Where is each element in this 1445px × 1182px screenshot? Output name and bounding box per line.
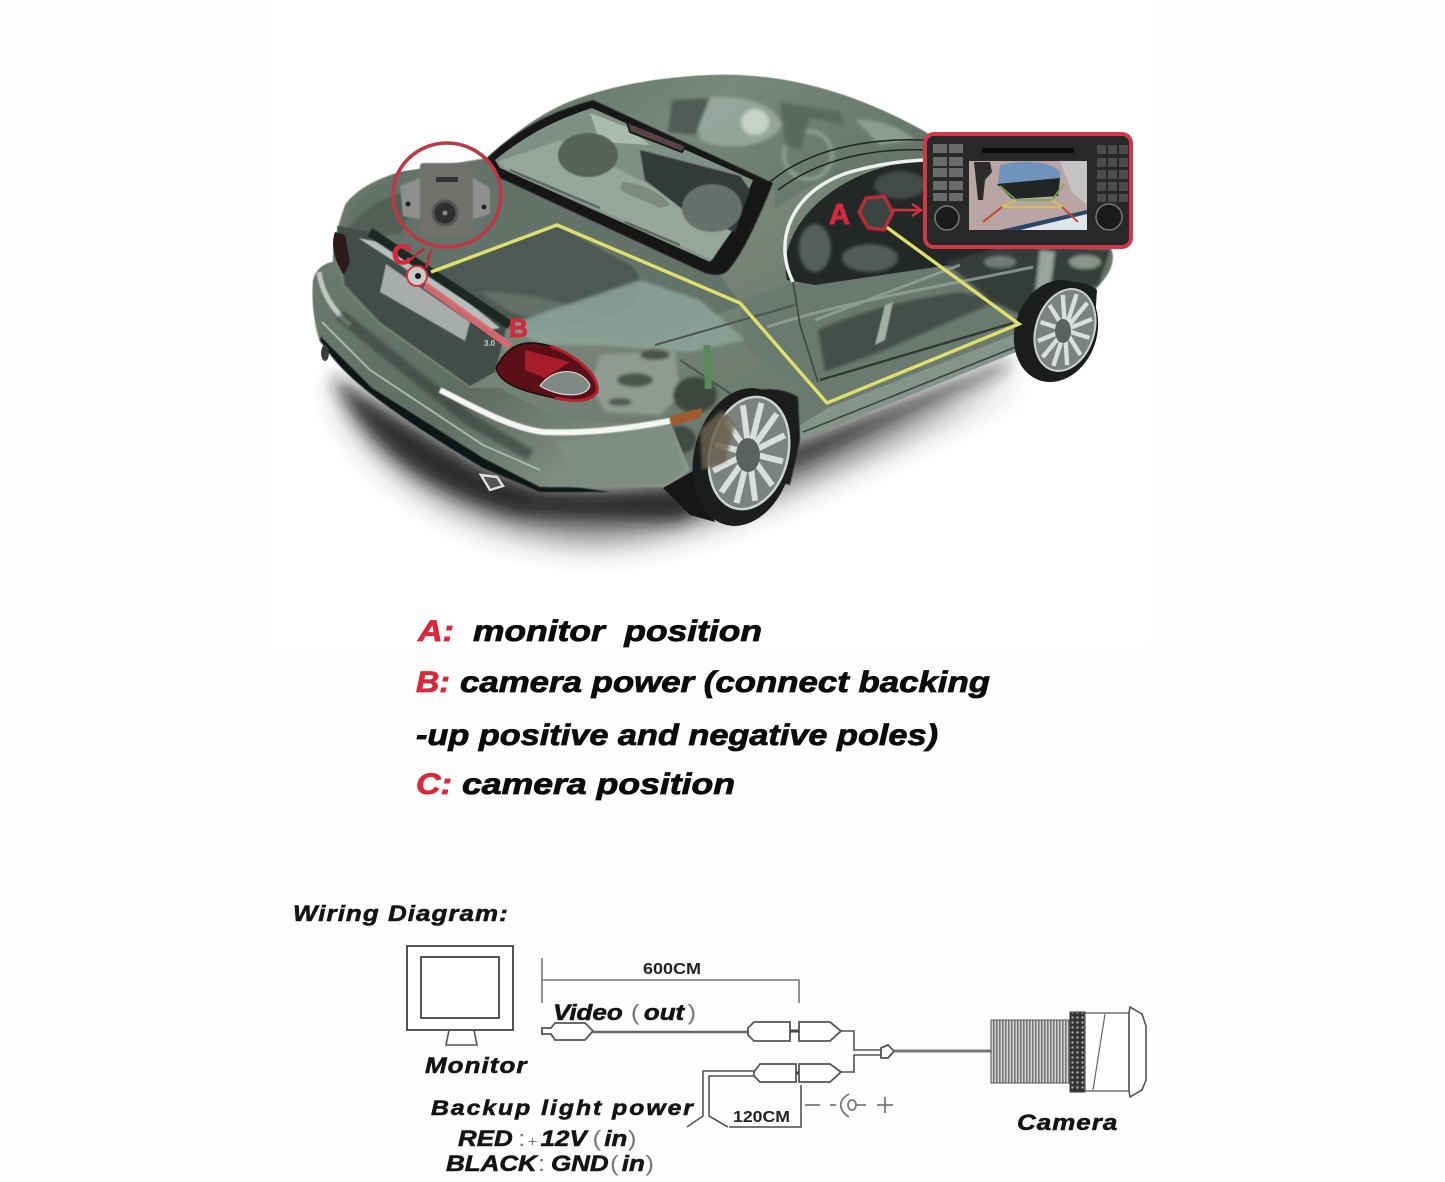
- front rim: [1024, 281, 1106, 379]
- arrow to monitor: [893, 204, 921, 216]
- camera zoom callout: [393, 143, 501, 268]
- camera view ground: [969, 161, 1087, 230]
- tail light lens: [540, 372, 590, 395]
- dark cabin interior: [640, 150, 750, 232]
- lens nose: [1129, 1007, 1146, 1097]
- car body silhouette: [313, 75, 1113, 488]
- camera body: [420, 163, 473, 237]
- hub: [736, 438, 760, 472]
- left exhaust tip: [321, 345, 329, 361]
- door bottom line: [820, 323, 1013, 380]
- 600CM bracket: [542, 958, 799, 1003]
- trunk lid: [340, 160, 742, 345]
- bumper lower pale panel: [545, 428, 685, 486]
- left headrest: [558, 133, 618, 177]
- rim base: [697, 388, 801, 518]
- shelf groove: [510, 170, 680, 245]
- model badge: 3.0: [484, 339, 496, 348]
- door panel dark reflection: [818, 292, 1000, 372]
- seat ghost: [799, 224, 831, 272]
- rear exhaust tip: [481, 475, 503, 490]
- pale ghost panel: [693, 97, 782, 146]
- page background panel: [272, 0, 1150, 645]
- legend B continued: -up positive and negative poles): [416, 719, 938, 752]
- legend text: [416, 615, 990, 801]
- 600CM dimension: [542, 958, 799, 1003]
- bumper ridge line: [322, 322, 540, 470]
- monitor red bezel: [925, 134, 1131, 247]
- tail light: [496, 343, 597, 400]
- side body lower panel: [740, 262, 1095, 440]
- right headrest: [682, 184, 742, 232]
- right dial: [1096, 204, 1122, 230]
- bracket screw right: [482, 204, 486, 210]
- video label: (: [631, 1001, 640, 1025]
- left button block: [933, 144, 963, 201]
- door shut line: [793, 282, 818, 382]
- dash ghost: [842, 244, 898, 272]
- red wire label: ): [628, 1127, 637, 1151]
- threaded body: [991, 1020, 1072, 1083]
- right keypad: [1097, 145, 1128, 202]
- left dial: [935, 206, 959, 230]
- yellow cable route: [431, 225, 1019, 403]
- pale view through glass: [590, 113, 650, 145]
- brake mechanism: [700, 410, 735, 470]
- legend A: A:: [417, 615, 454, 648]
- connector video 2: [799, 1022, 841, 1041]
- legend A: monitor position: [473, 615, 762, 648]
- video label: out: [644, 1001, 685, 1025]
- bumper top highlight: [319, 272, 350, 325]
- marker: camera position ring: [407, 266, 427, 286]
- monitor inner screen: [421, 957, 499, 1018]
- junction body: [881, 1045, 894, 1058]
- monitor screen: [969, 161, 1087, 230]
- window frame: [487, 100, 773, 275]
- power connector 1: [754, 1064, 796, 1082]
- rear bumper: [313, 262, 690, 487]
- red wire label: +: [528, 1134, 537, 1150]
- tail light edge: [550, 346, 597, 400]
- chrome bumper strip: [440, 390, 670, 432]
- monitor outer frame: [407, 946, 513, 1030]
- rear fascia dark panel: [337, 226, 507, 386]
- bracket screw left: [406, 202, 410, 206]
- trunk interior recess: [433, 226, 641, 326]
- rear quarter panel highlight: [507, 280, 745, 352]
- knurled ring: [1070, 1012, 1085, 1092]
- camera brackets: [400, 176, 490, 220]
- centre armrest: [620, 182, 670, 208]
- trunk upper reflection: [345, 190, 420, 235]
- bay shadow: [945, 245, 1110, 320]
- tyre: [679, 377, 807, 537]
- black wire label: in: [622, 1152, 645, 1176]
- under-bumper shadow: [663, 470, 715, 522]
- wire to junction: [841, 1031, 881, 1050]
- legend C: C:: [416, 768, 452, 801]
- license plate: [380, 264, 470, 341]
- camera label: Camera: [1017, 1111, 1117, 1135]
- red wire label: (: [593, 1127, 601, 1151]
- side window chrome frame: [785, 160, 925, 282]
- power connector 2: [799, 1064, 841, 1082]
- 120CM bracket: [729, 1085, 801, 1127]
- underside dark band: [320, 325, 610, 492]
- front arch: [1035, 282, 1097, 330]
- bay pale parts: [1035, 250, 1055, 295]
- car illustration: [313, 75, 1131, 540]
- window glass: [495, 108, 753, 262]
- power wire pair: [687, 1071, 754, 1127]
- rear wheel: [663, 377, 807, 537]
- video wire: [593, 1031, 748, 1033]
- trunk recess light streak: [480, 292, 600, 322]
- marker bar to tail light: [425, 285, 510, 346]
- video cable: [542, 1022, 881, 1050]
- camera view wall: [1060, 161, 1087, 205]
- front hub: [1055, 319, 1071, 343]
- power cable: [687, 1055, 881, 1127]
- front spokes: [1029, 286, 1101, 374]
- green strut: [703, 345, 712, 389]
- camera lens: [433, 201, 457, 225]
- monitor position hexagon: [859, 196, 893, 230]
- ghost window: [741, 109, 769, 135]
- tail light housing: [496, 343, 597, 400]
- rear window: [487, 100, 773, 275]
- rear wheel-well mechanics: [590, 350, 717, 454]
- video plug: [542, 1023, 593, 1040]
- soft outer shadow: [335, 375, 1020, 540]
- roof rail lines: [770, 140, 925, 190]
- barrel accent: [1093, 1014, 1105, 1090]
- dense contact shadow: [330, 358, 1015, 520]
- black wire label: (: [610, 1152, 619, 1176]
- white pavement strip: [1020, 213, 1087, 230]
- legend C: camera position: [462, 768, 735, 801]
- red wire label: in: [604, 1127, 627, 1151]
- side window interior: [786, 160, 1000, 285]
- monitor icon: [407, 946, 513, 1045]
- wheel ghost: [874, 171, 926, 199]
- dash ghost: [780, 102, 845, 150]
- backup power label: Backup light power: [431, 1096, 694, 1120]
- junction and camera lead: [881, 1045, 991, 1058]
- video label: ): [688, 1001, 696, 1025]
- camera slot: [436, 177, 458, 182]
- parcel shelf: [497, 140, 735, 260]
- DC polarity symbol: [805, 1094, 893, 1117]
- video label: Video: [553, 1001, 623, 1025]
- steering wheel ghost: [784, 131, 832, 179]
- headrest ghost: [855, 120, 915, 145]
- mechanical pale cluster: [590, 350, 680, 415]
- lens glint: [442, 210, 448, 216]
- sill face: [800, 330, 1035, 440]
- connector gap: [796, 1072, 799, 1074]
- bumper recess: [340, 315, 530, 455]
- chrome boot strip: [358, 238, 500, 330]
- person silhouette: [974, 162, 992, 200]
- front tyre: [1001, 269, 1111, 393]
- dark mechanical parts: [617, 373, 653, 387]
- monitor stand: [446, 1030, 477, 1045]
- legend B: B:: [416, 666, 450, 699]
- roof: [487, 75, 927, 210]
- front wheel: [1001, 269, 1111, 393]
- wire to junction: [841, 1055, 881, 1072]
- dark boot lip: [370, 232, 510, 325]
- tail lamp left: [333, 232, 350, 275]
- head unit monitor: [925, 134, 1131, 247]
- tail light red reflector: [525, 350, 570, 378]
- wheel arch shadow: [705, 389, 800, 485]
- car ground shadow: [330, 358, 1020, 540]
- spokes: [703, 395, 795, 511]
- red wire label: 12V: [541, 1127, 589, 1151]
- camera barrel: [1085, 1013, 1129, 1091]
- parking guide lines: [983, 184, 1078, 222]
- monitor label: Monitor: [425, 1054, 528, 1078]
- callout connector: [410, 248, 431, 268]
- 120CM label: 120CM: [733, 1109, 790, 1126]
- callout circle: [393, 143, 501, 247]
- label: A: A: [829, 199, 850, 231]
- 120CM dimension: [729, 1085, 801, 1127]
- connector video 1: [748, 1022, 790, 1041]
- coil rail ghost: [655, 305, 795, 400]
- connector gap: [790, 1030, 799, 1032]
- red wire label: RED: [458, 1127, 513, 1151]
- legend B: camera power (connect backing: [460, 666, 990, 699]
- camera icon: [991, 1007, 1146, 1097]
- parked car: [998, 162, 1060, 186]
- wiring diagram: [293, 902, 1146, 1176]
- engine bay mechanics: [945, 245, 1110, 320]
- dark pillar ghost: [668, 98, 710, 135]
- door pale flash: [875, 302, 893, 345]
- black wire label: GND: [551, 1152, 609, 1176]
- indicator lens: [670, 408, 702, 426]
- hole: [415, 273, 421, 279]
- side window cabin ghosts: [799, 171, 926, 272]
- 600CM label: 600CM: [643, 961, 701, 978]
- brake light: [627, 122, 686, 152]
- body rail lines: [767, 265, 1033, 327]
- car underside: [997, 178, 1060, 199]
- roof interior ghost details: [668, 97, 915, 179]
- label: B: B: [509, 313, 528, 343]
- black wire label: :: [538, 1152, 545, 1176]
- black wire label: ): [645, 1152, 654, 1176]
- sill line: [803, 342, 1028, 432]
- label: C: C: [392, 239, 412, 270]
- wiring title: Wiring Diagram:: [293, 902, 508, 926]
- disc slot: [982, 148, 1074, 153]
- ring: [407, 266, 427, 286]
- sill: [800, 330, 1035, 440]
- black wire label: BLACK: [446, 1152, 539, 1176]
- dark kerb: [1000, 210, 1087, 230]
- red wire label: :: [518, 1127, 525, 1151]
- camera lead: [894, 1050, 991, 1052]
